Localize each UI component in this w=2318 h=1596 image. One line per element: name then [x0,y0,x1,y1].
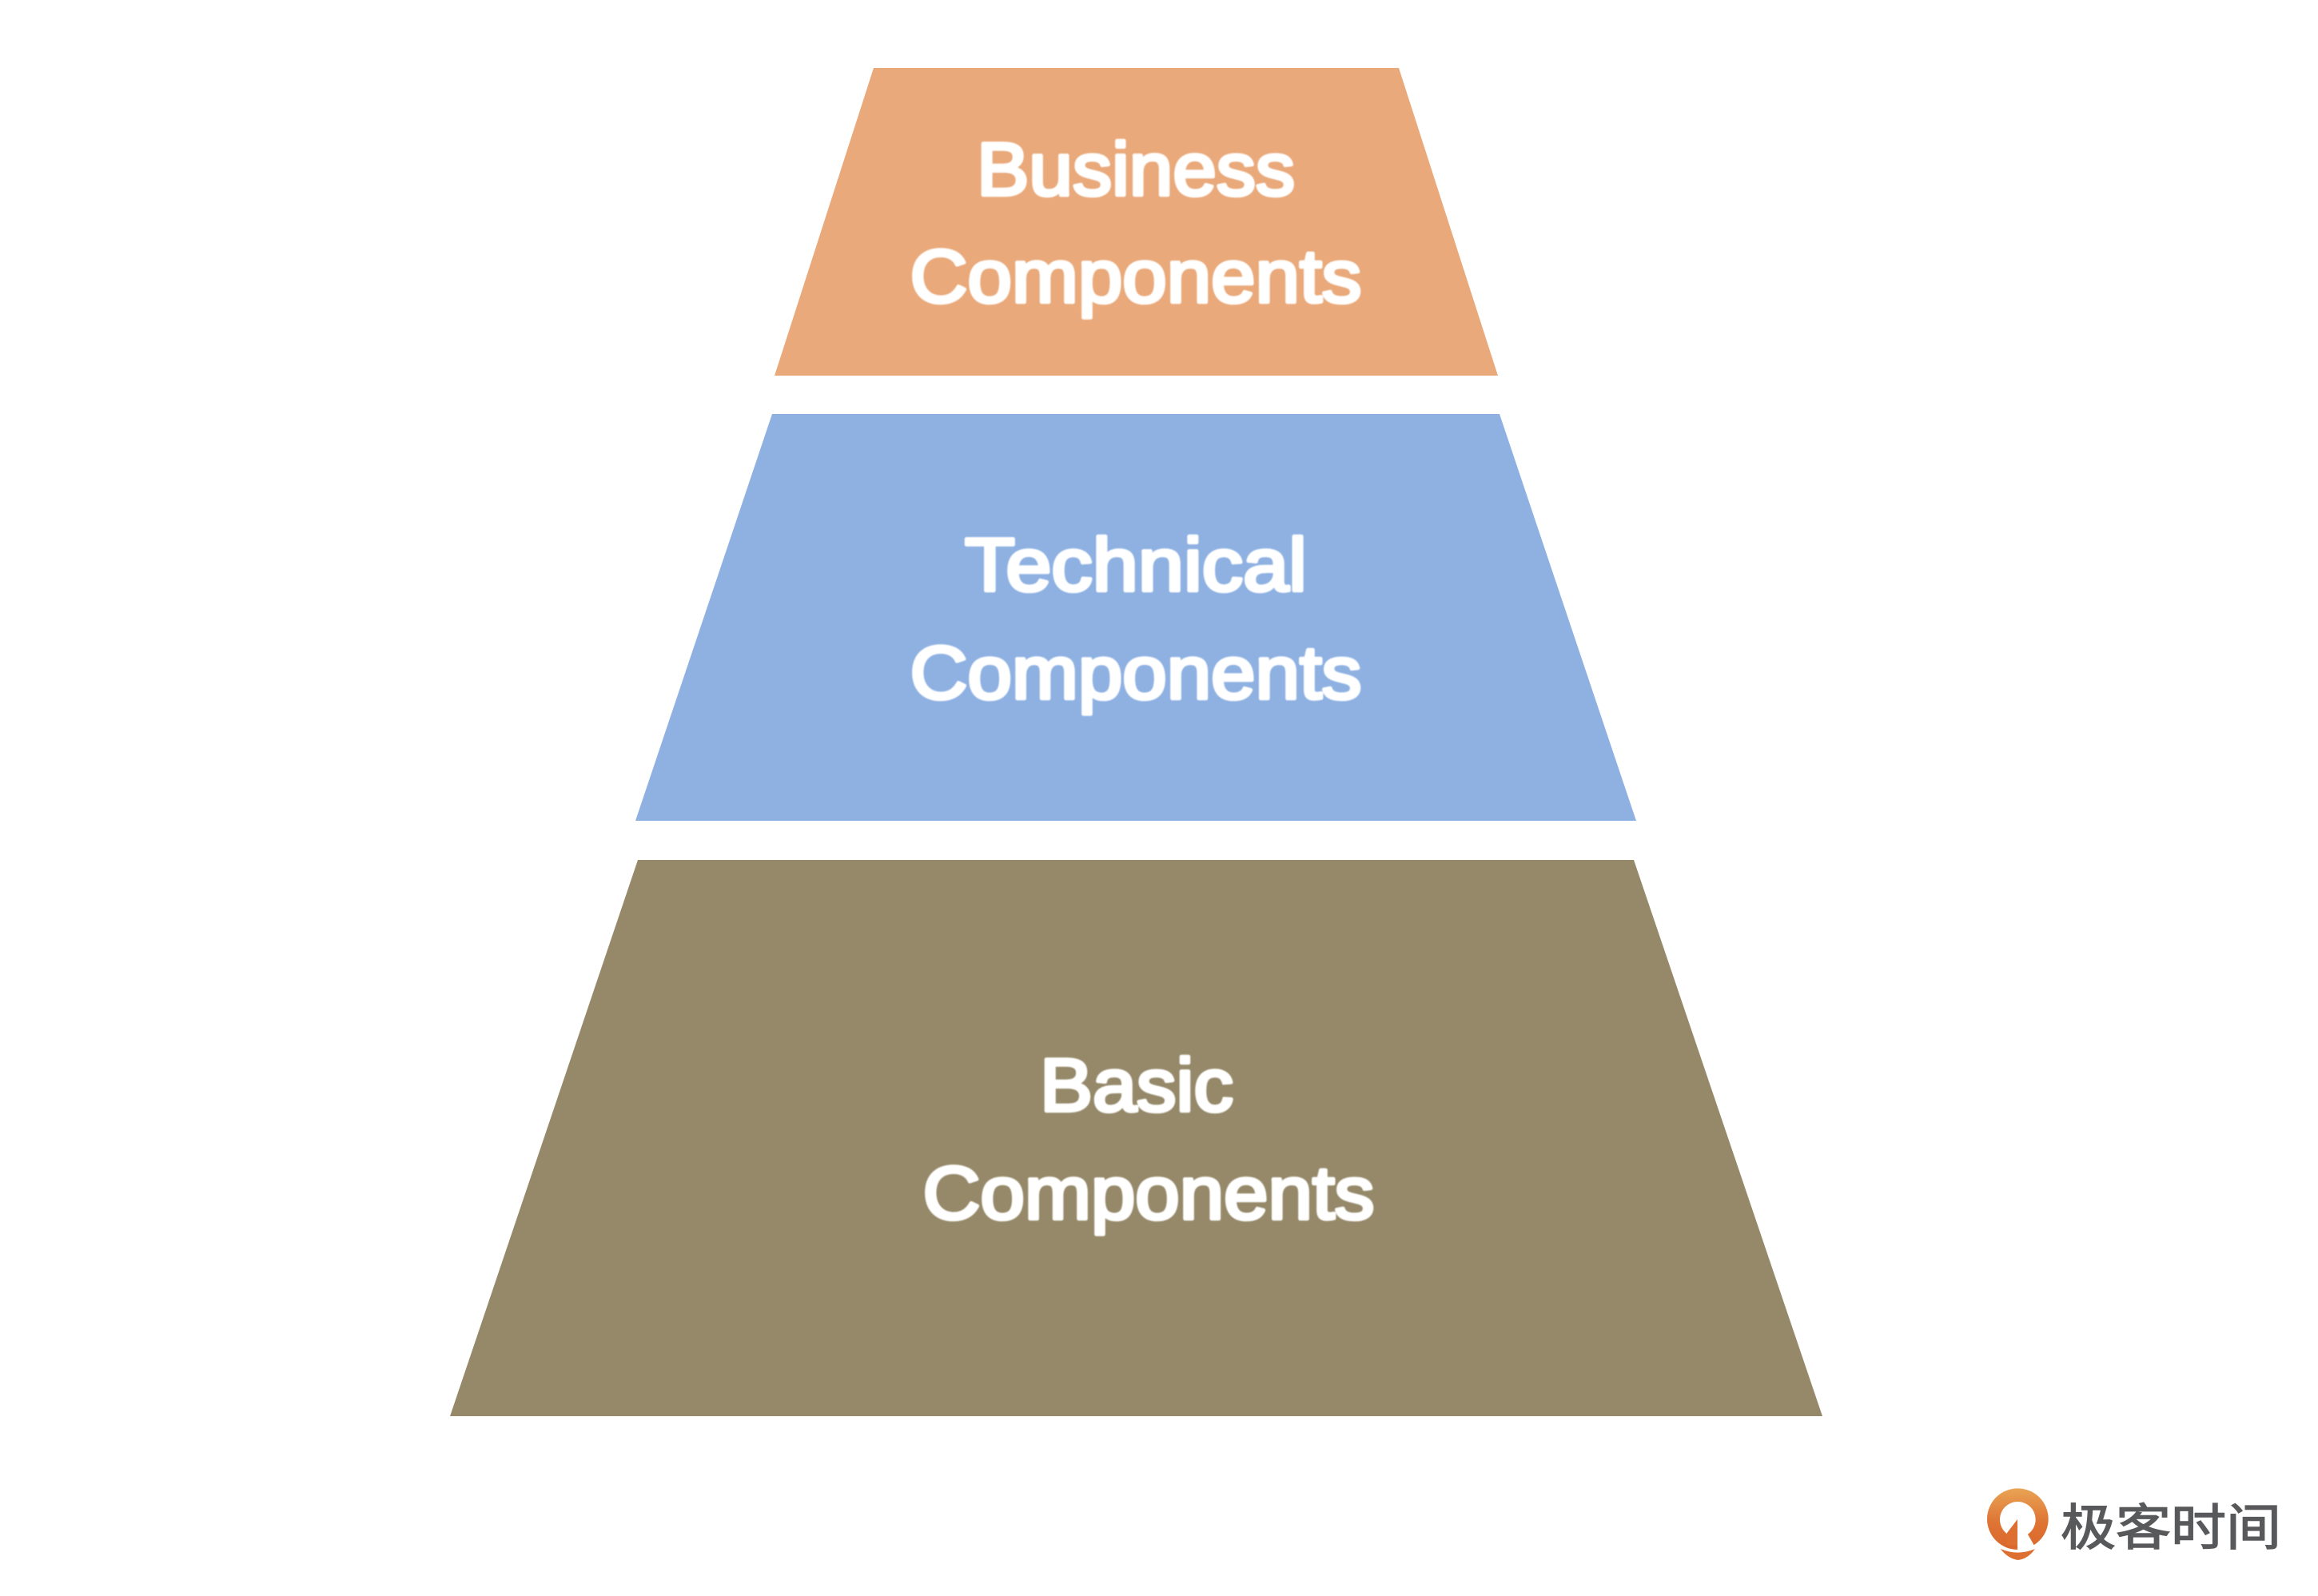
panel: business components tier [775,68,1498,376]
label: Basic Components: Basic [1040,1043,1233,1127]
label: Business Components: Business [977,127,1295,211]
orange trapezoid [775,68,1498,376]
panel: technical components tier [635,414,1636,821]
label: Business Components [910,127,1362,318]
label: Technical Components [910,523,1362,714]
icon: orange map-pin ring with arrow [1987,1488,2049,1560]
logo: GeekTime [1987,1488,2281,1560]
label: Basic Components [922,1043,1375,1235]
blue trapezoid [635,414,1636,821]
label: Basic Components: Components [922,1151,1375,1235]
logo wordmark: 极客时间 [2061,1501,2281,1556]
label: Business Components: Components [910,234,1362,318]
brown trapezoid [450,860,1822,1416]
label: Technical Components: Components [910,631,1362,714]
label: Technical Components: Technical [965,523,1307,607]
panel: basic components tier [450,860,1822,1416]
